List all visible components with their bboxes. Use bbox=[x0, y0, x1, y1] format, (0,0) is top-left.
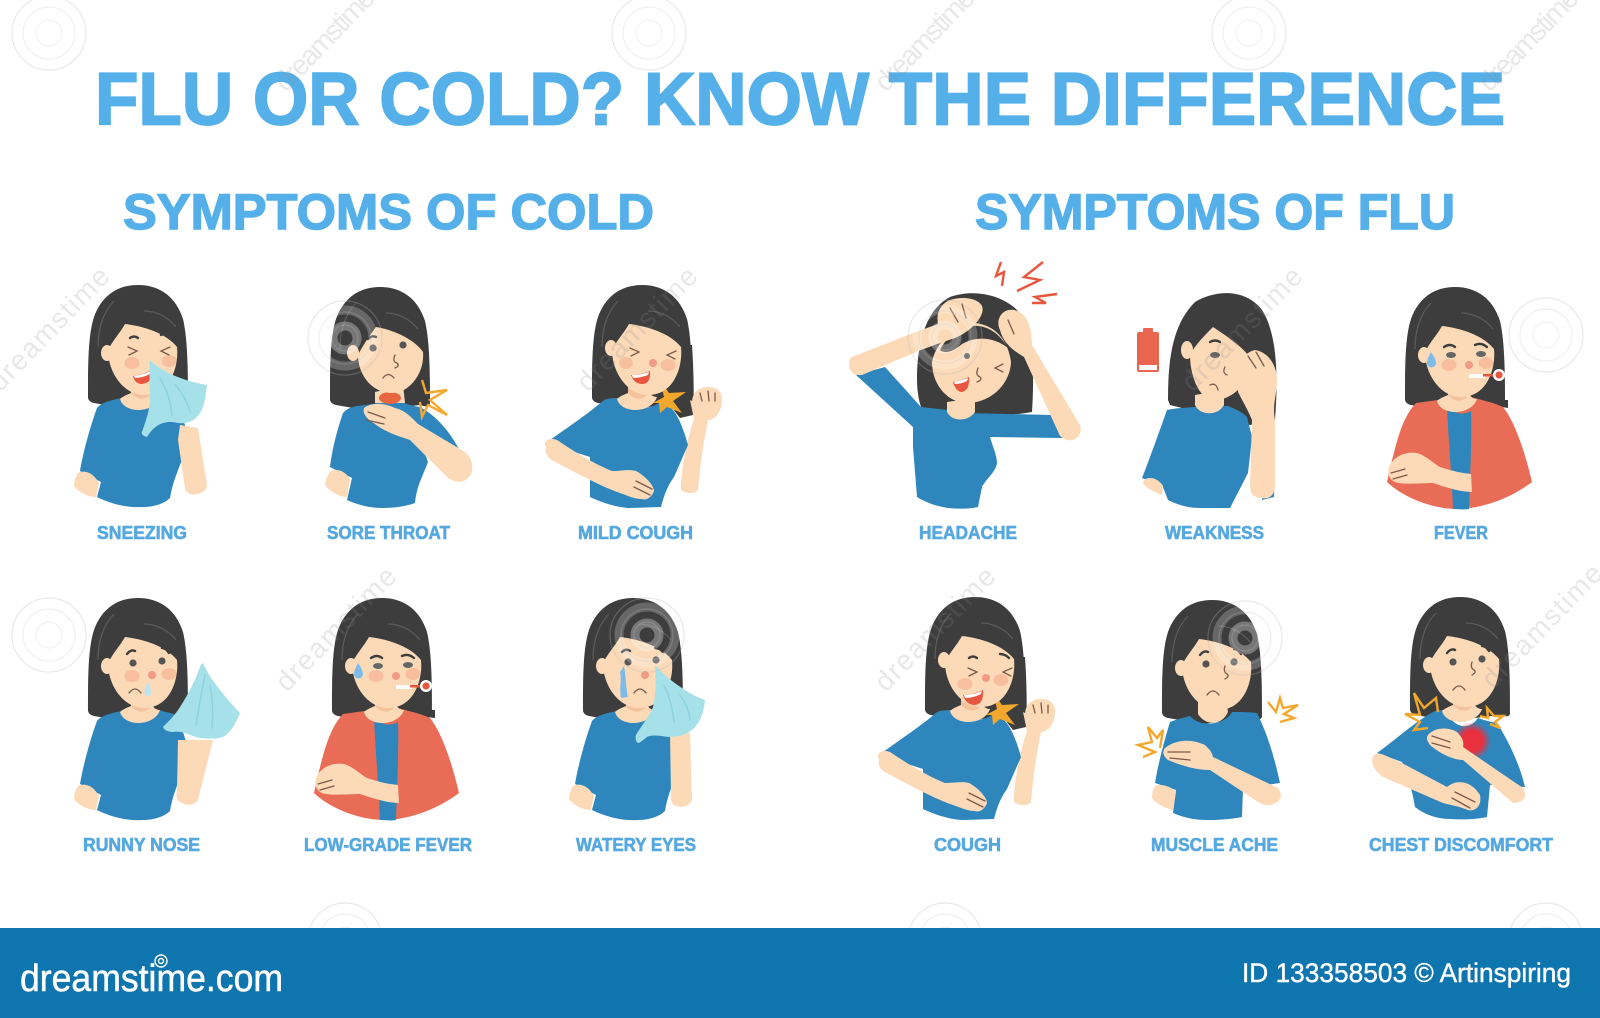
watermark text: dreamstime bbox=[868, 561, 1001, 697]
illustration: watery eyes bbox=[569, 598, 705, 820]
illustration: muscle ache bbox=[1138, 600, 1298, 820]
footer banner bbox=[0, 928, 1600, 1018]
label: WEAKNESS bbox=[1165, 523, 1264, 543]
label: SNEEZING bbox=[97, 523, 187, 543]
heading: symptoms of flu: SYMPTOMS OF FLU bbox=[975, 184, 1455, 240]
illustration: sneezing bbox=[74, 285, 207, 507]
pain spark bbox=[420, 380, 447, 417]
label: MILD COUGH bbox=[578, 523, 693, 543]
illustration: headache bbox=[849, 262, 1081, 509]
illustration: chest discomfort bbox=[1372, 597, 1525, 819]
lightning bolts bbox=[996, 262, 1057, 303]
watermark text: dreamstime bbox=[570, 261, 703, 397]
label: COUGH bbox=[934, 835, 1001, 855]
label: RUNNY NOSE bbox=[83, 835, 200, 855]
illustration: fever bbox=[1387, 287, 1532, 509]
logo spiral bbox=[155, 955, 167, 967]
label: LOW-GRADE FEVER bbox=[304, 835, 472, 855]
pain sparks bbox=[1405, 693, 1503, 730]
logo: dreamstime.com bbox=[20, 958, 283, 1000]
tissue bbox=[163, 663, 240, 739]
watermark text: dreamstime bbox=[1175, 261, 1308, 397]
battery bbox=[1137, 328, 1159, 372]
tissue bbox=[636, 665, 705, 743]
watermark text: dreamstime bbox=[269, 561, 402, 697]
label: CHEST DISCOMFORT bbox=[1369, 835, 1553, 855]
heading: symptoms of cold: SYMPTOMS OF COLD bbox=[123, 184, 654, 240]
title: FLU OR COLD? KNOW THE DIFFERENCE bbox=[95, 58, 1505, 140]
image id and credit: ID 133358503 © Artinspiring bbox=[1242, 958, 1571, 988]
illustration: runny nose bbox=[74, 598, 240, 820]
label: HEADACHE bbox=[919, 523, 1017, 543]
tears bbox=[620, 666, 628, 698]
label: FEVER bbox=[1434, 523, 1488, 543]
label: WATERY EYES bbox=[576, 835, 696, 855]
illustration: cough bbox=[878, 597, 1055, 820]
watermark text bbox=[0, 0, 1600, 697]
pain sparks bbox=[1138, 698, 1298, 757]
illustration: low-grade fever bbox=[314, 598, 459, 820]
illustration: weakness bbox=[1137, 293, 1277, 508]
illustration: mild cough bbox=[545, 285, 722, 508]
illustration: sore throat bbox=[325, 287, 472, 508]
tissue bbox=[142, 360, 207, 437]
label: MUSCLE ACHE bbox=[1151, 835, 1278, 855]
label: SORE THROAT bbox=[327, 523, 450, 543]
